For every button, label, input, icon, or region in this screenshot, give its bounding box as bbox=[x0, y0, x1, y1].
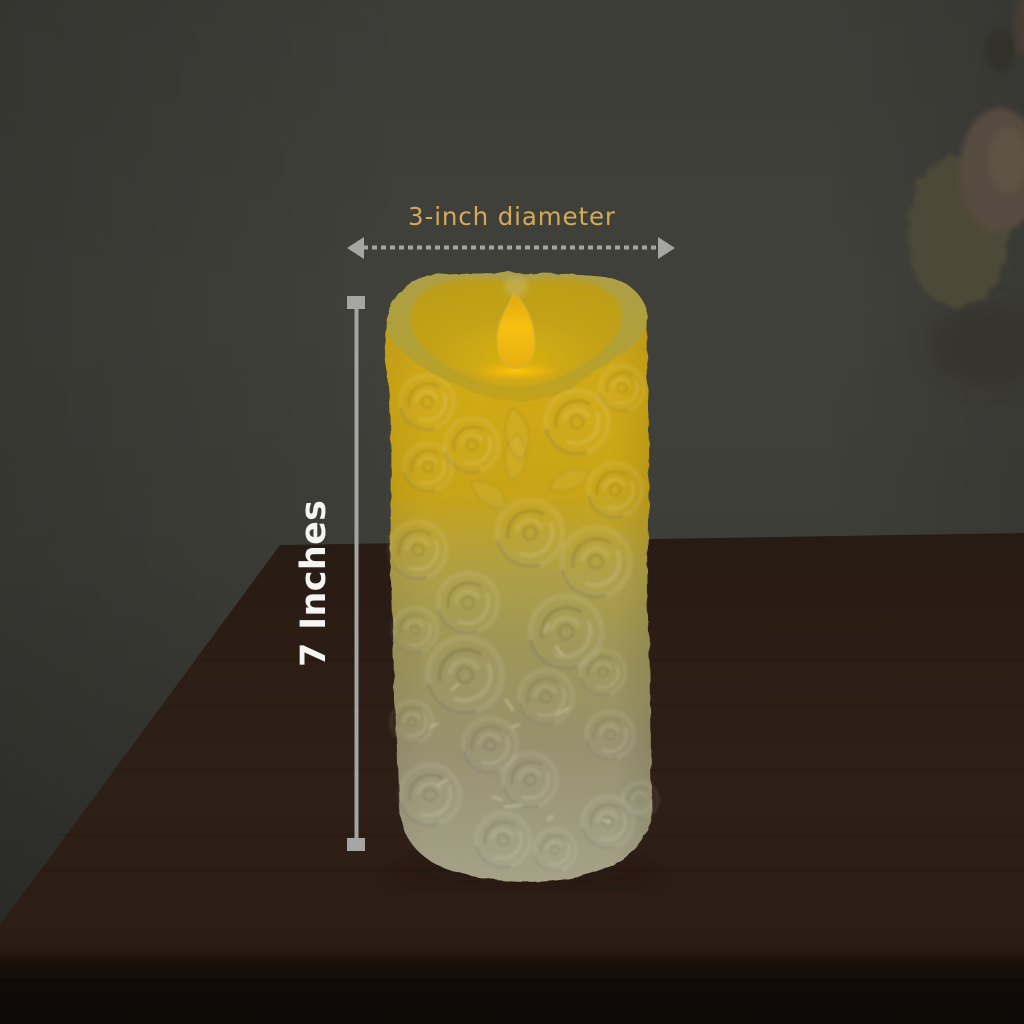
candle shadow bbox=[390, 862, 660, 882]
candle bbox=[385, 273, 660, 882]
pale notch at top of bowl bbox=[504, 277, 528, 297]
arrow: horizontal dotted bbox=[347, 237, 675, 259]
candle top rim bbox=[386, 273, 648, 402]
dried flowers at right edge bbox=[908, 0, 1024, 385]
rose relief pattern bbox=[390, 366, 658, 871]
candle bowl bbox=[410, 279, 622, 386]
flame glow bbox=[470, 361, 562, 381]
arrow: vertical measure bar bbox=[347, 296, 365, 851]
wooden table bbox=[0, 533, 1024, 1024]
wax highlights bbox=[430, 625, 610, 822]
label: 3-inch diameter: 3-inch diameter bbox=[408, 202, 616, 231]
dimension: 3-inch diameter bbox=[347, 202, 675, 259]
candle body bbox=[385, 273, 652, 882]
dimension: 7 inches bbox=[294, 296, 365, 851]
flame bbox=[497, 293, 535, 368]
label: 7 Inches: 7 Inches bbox=[294, 500, 334, 667]
